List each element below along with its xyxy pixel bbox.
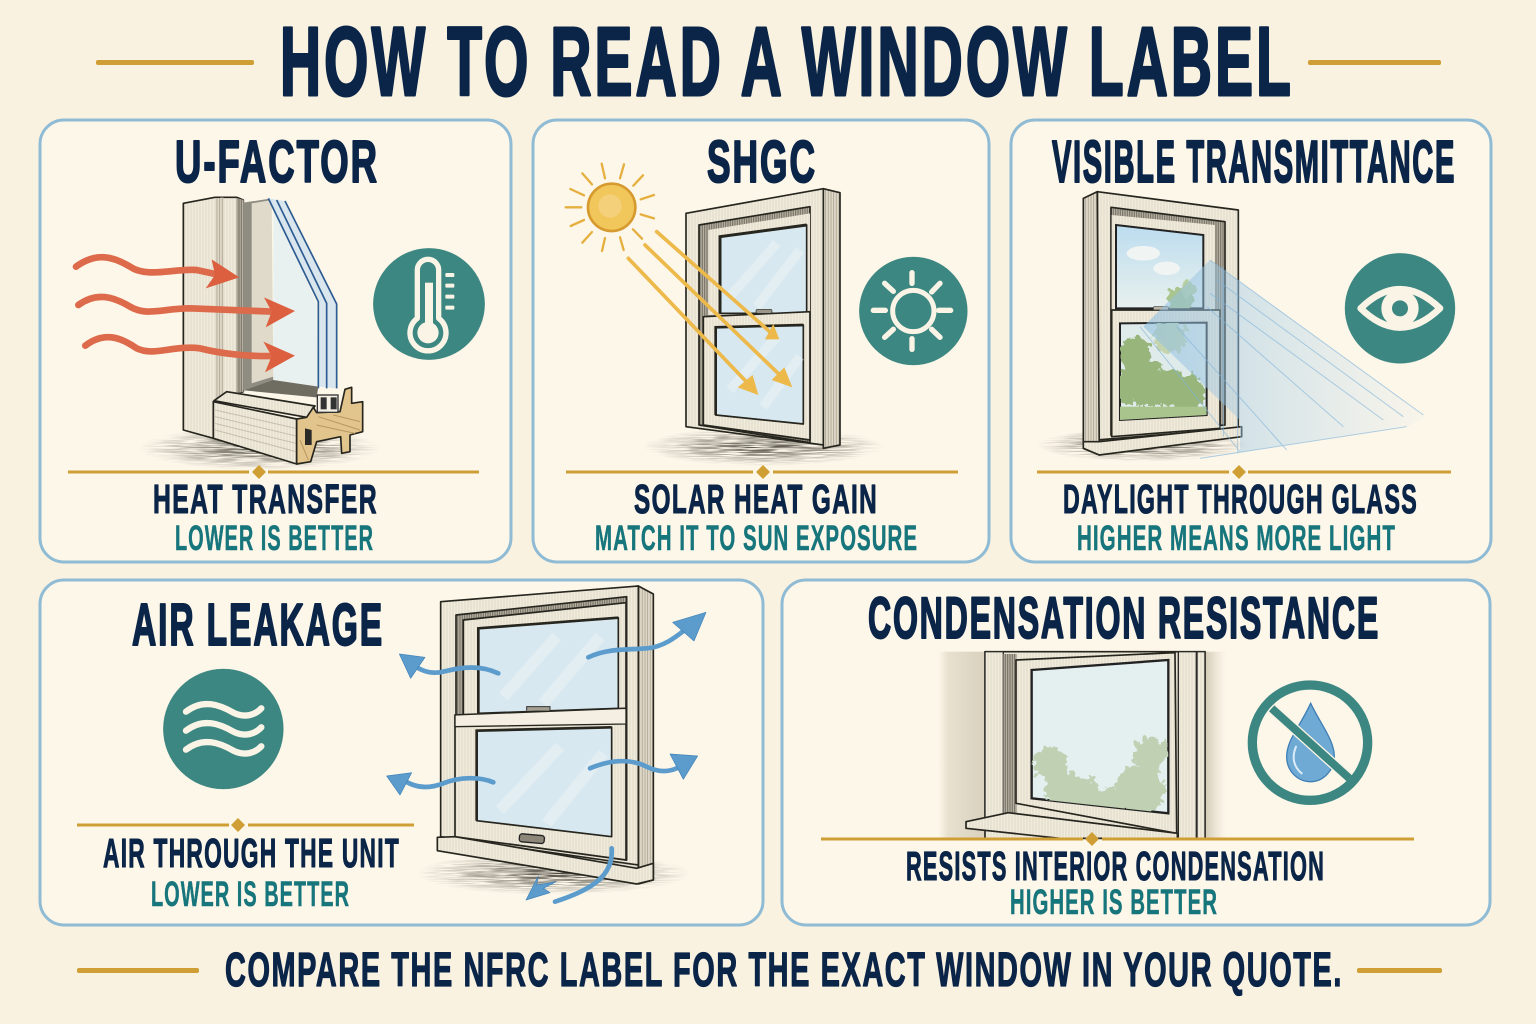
label: solar heat gain: SOLAR HEAT GAIN xyxy=(634,476,878,522)
heading: air leakage: AIR LEAKAGE xyxy=(132,592,384,658)
icon: eye xyxy=(1345,253,1455,363)
heading: U-factor: U-FACTOR xyxy=(175,129,379,195)
icon: thermometer xyxy=(373,248,485,360)
note: higher is better: HIGHER IS BETTER xyxy=(1010,883,1218,922)
heading: SHGC: SHGC xyxy=(707,129,817,195)
panel: U-factor xyxy=(40,120,511,562)
illustration: window with air arrows xyxy=(387,586,706,902)
icon: no condensation drop xyxy=(1252,685,1368,800)
icon: sun xyxy=(566,164,654,251)
illustration: daylight through window xyxy=(1037,192,1427,462)
panel: visible transmittance xyxy=(1011,120,1491,562)
panel: air leakage xyxy=(40,580,763,925)
note: lower is better: LOWER IS BETTER xyxy=(151,875,350,914)
label: air through the unit: AIR THROUGH THE UNIT xyxy=(103,830,400,876)
icon: sun badge xyxy=(859,257,967,365)
icon: air waves xyxy=(163,669,283,789)
label: heat transfer: HEAT TRANSFER xyxy=(153,476,378,522)
illustration: interior window xyxy=(938,652,1227,838)
panel: SHGC xyxy=(533,120,989,562)
illustration: sun rays through window xyxy=(566,164,883,466)
panel: condensation resistance xyxy=(782,580,1490,925)
note: lower is better: LOWER IS BETTER xyxy=(175,519,374,558)
note: match to sun exposure: MATCH IT TO SUN EXPOSURE xyxy=(595,519,918,558)
illustration: window frame cross-section with heat arrows xyxy=(76,197,380,470)
